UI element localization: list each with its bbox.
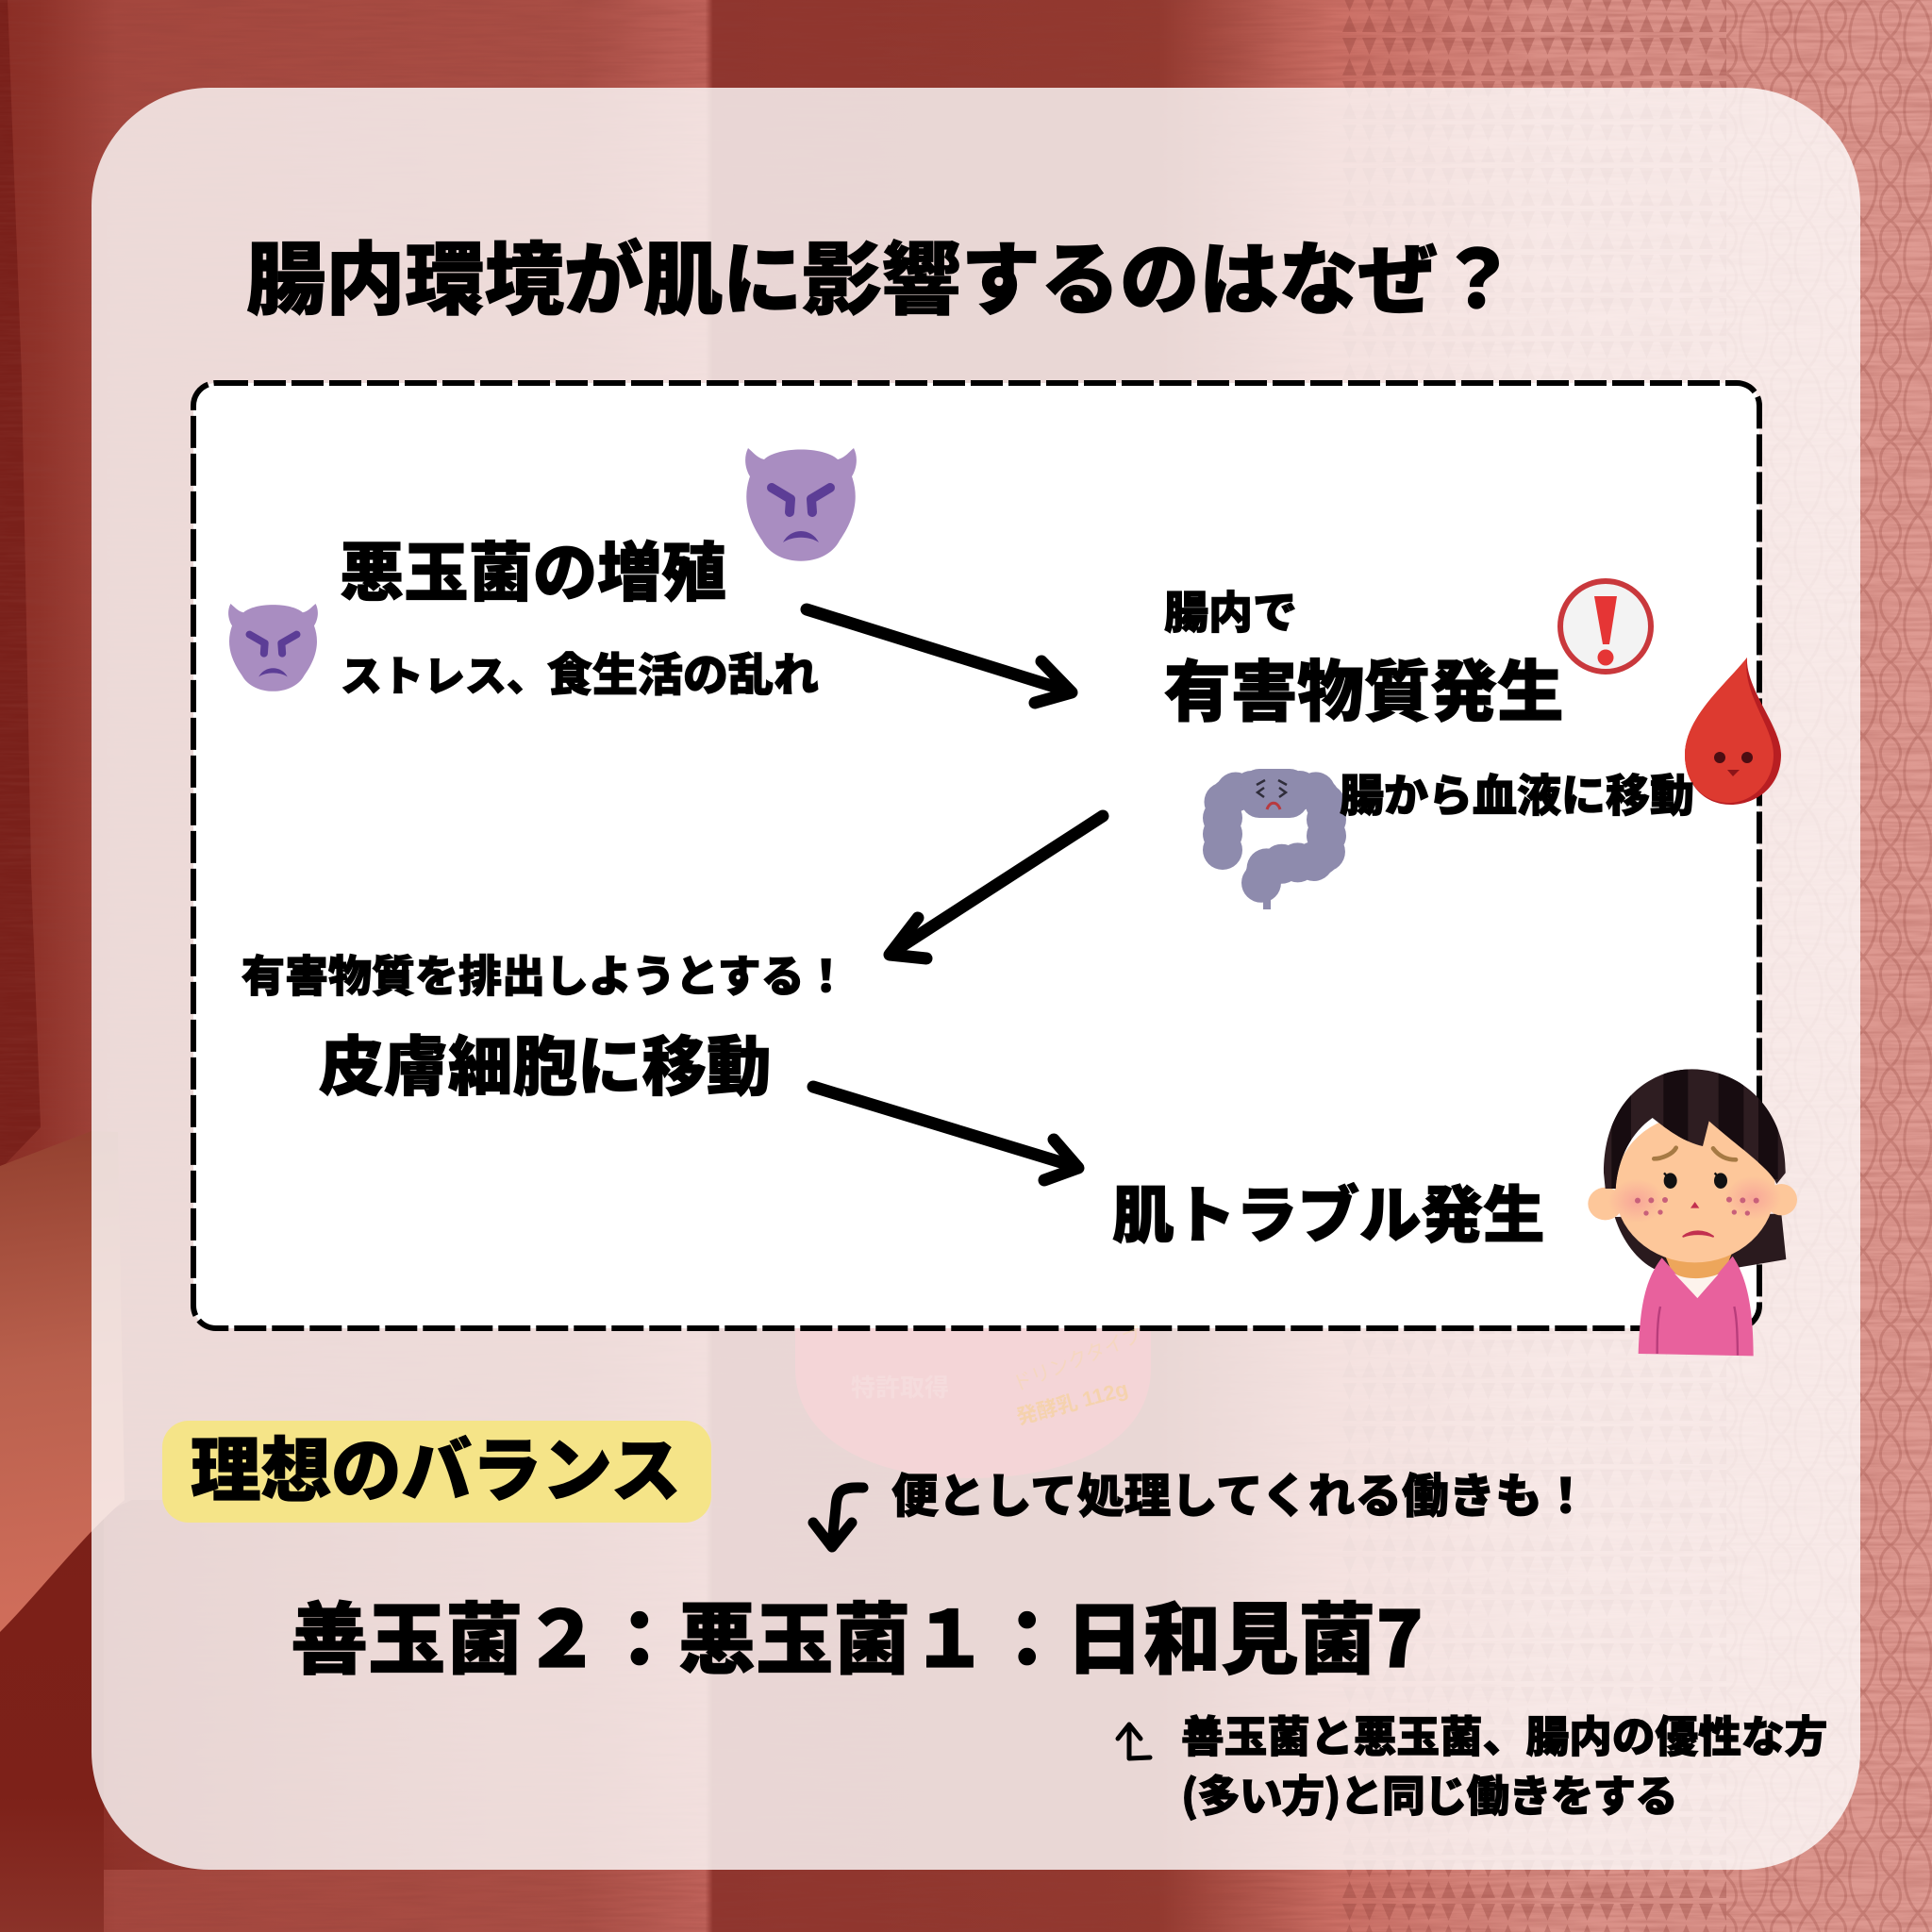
bottle label ghost text: ドリンクタイプ bbox=[1009, 1324, 1145, 1396]
arrow: toxins to skin cells bbox=[890, 816, 1103, 958]
icon: worried woman with pimples bbox=[1588, 1066, 1797, 1356]
heading: toxins generated: 有害物質発生 bbox=[1164, 639, 1564, 735]
icon: large purple devil bbox=[745, 448, 857, 561]
badge: ideal balance: 理想のバランス bbox=[191, 1415, 681, 1516]
text: moves from gut to blood: 腸から血液に移動 bbox=[1340, 759, 1694, 824]
text: causes: 食生活の乱れ bbox=[547, 638, 819, 704]
title: 腸内環境が肌に影響するのはなぜ？ bbox=[246, 216, 1517, 331]
text: explanation of opportunistic bacteria: 善玉菌と悪玉菌、腸内の優性な方 bbox=[1181, 1703, 1827, 1765]
bottle label ghost text: 特許取得 bbox=[851, 1374, 949, 1402]
icon: small purple devil bbox=[228, 604, 318, 691]
ratio: ideal bacteria balance: 善玉菌２：悪玉菌１：日和見菌7 bbox=[291, 1577, 1424, 1690]
arrow: curved up bbox=[1118, 1724, 1150, 1758]
arrow: curved down bbox=[813, 1488, 863, 1547]
icon: suffering intestine bbox=[1223, 769, 1326, 909]
text: explanation of opportunistic bacteria bbox=[1181, 1703, 1827, 1824]
text: processes as stool: 便として処理してくれる働きも！ bbox=[891, 1458, 1589, 1526]
text: tries to expel toxins: 有害物質を排出しようとする！ bbox=[242, 942, 848, 1005]
heading: moves to skin cells: 皮膚細胞に移動 bbox=[319, 1015, 772, 1108]
heading: skin trouble occurs: 肌トラブル発生 bbox=[1112, 1165, 1545, 1255]
text: in the intestine: 腸内で bbox=[1164, 576, 1297, 641]
arrow: growth to toxins bbox=[807, 609, 1072, 703]
text: causes: ストレス、 bbox=[341, 642, 548, 703]
icon: blood drop bbox=[1685, 658, 1781, 805]
bottle label ghost text: 発酵乳 112g bbox=[1014, 1376, 1130, 1429]
arrow: skin cells to skin trouble bbox=[813, 1087, 1078, 1180]
bottle label ghost text bbox=[851, 1324, 1145, 1429]
icon: exclamation mark bbox=[1560, 581, 1651, 672]
text: explanation of opportunistic bacteria: (多い方)と同じ働きをする bbox=[1181, 1762, 1677, 1824]
heading: bad bacteria growth: 悪玉菌の増殖 bbox=[340, 521, 726, 614]
panel: flow diagram box bbox=[193, 383, 1759, 1328]
